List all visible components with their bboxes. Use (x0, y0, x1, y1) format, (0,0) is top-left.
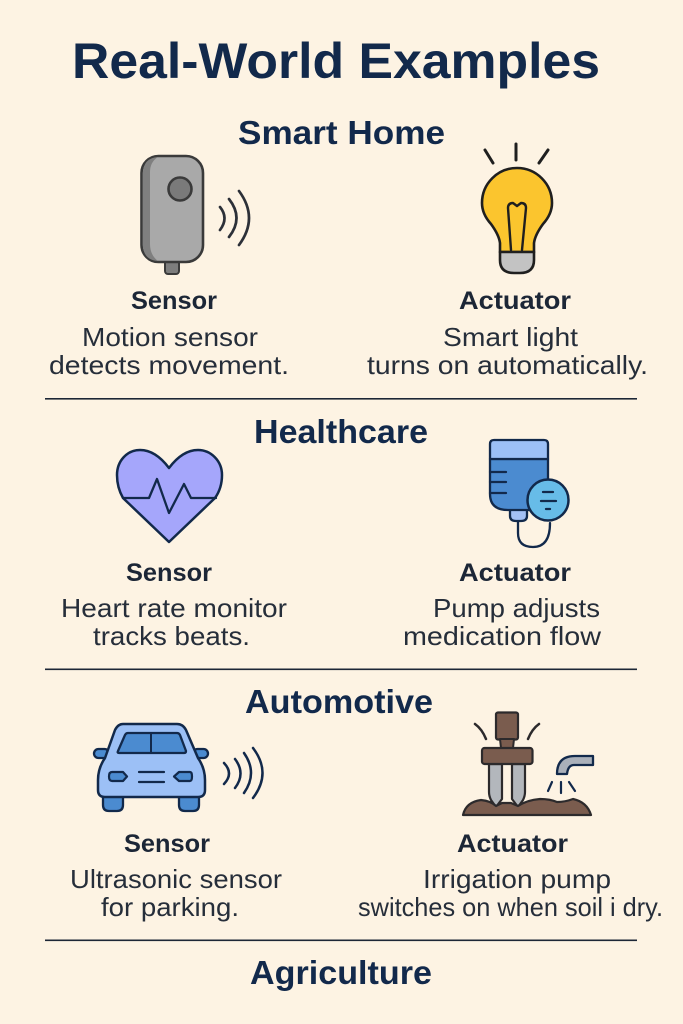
actuator text: medication flow (403, 621, 601, 651)
sensor text: Motion sensor (82, 322, 258, 352)
icon: soil probe and irrigation faucet (463, 712, 593, 815)
icon: heart rate (117, 450, 222, 542)
actuator text (403, 559, 601, 651)
actuator text (358, 830, 663, 922)
sensor text (61, 559, 287, 651)
sensor text: Sensor (126, 559, 212, 587)
heading: automotive: Automotive (245, 683, 433, 720)
icon: medication pump (490, 440, 568, 547)
actuator text: Actuator (457, 830, 568, 858)
panel: automotive (70, 683, 663, 922)
sensor text (70, 830, 282, 922)
sensor text: Ultrasonic sensor (70, 864, 282, 894)
actuator text: switches on when soil i dry. (358, 892, 663, 922)
panel: smart home (49, 114, 648, 380)
icon: smart light bulb (482, 144, 552, 273)
icon: car with ultrasonic waves (94, 724, 262, 811)
heading: smart home: Smart Home (238, 114, 445, 151)
heading: agriculture: Agriculture (250, 954, 432, 991)
actuator text: turns on automatically. (367, 350, 648, 380)
sensor text (49, 287, 289, 380)
actuator text: Actuator (459, 559, 571, 587)
actuator text: Actuator (459, 287, 571, 315)
actuator text: Pump adjusts (433, 593, 600, 623)
actuator text: Smart light (443, 322, 579, 352)
sensor text: Heart rate monitor (61, 593, 287, 623)
sensor text: Sensor (131, 287, 217, 315)
sensor text: tracks beats. (93, 621, 250, 651)
sensor text: Sensor (124, 830, 210, 858)
heading: healthcare: Healthcare (254, 413, 428, 450)
panel: healthcare (61, 413, 601, 651)
sensor text: for parking. (101, 892, 239, 922)
icon: motion sensor (142, 156, 249, 274)
title: Real-World Examples (72, 33, 600, 89)
actuator text (367, 287, 648, 380)
sensor text: detects movement. (49, 350, 289, 380)
actuator text: Irrigation pump (423, 864, 611, 894)
